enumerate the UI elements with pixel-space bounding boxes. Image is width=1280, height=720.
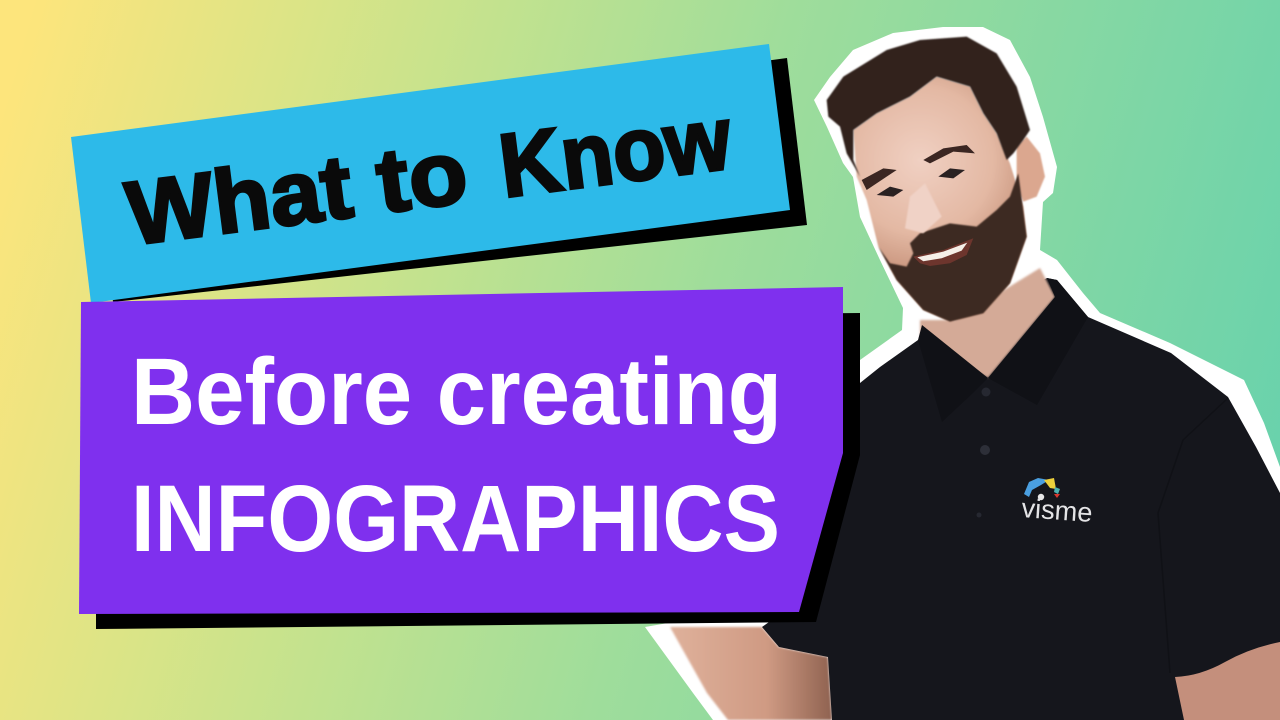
sleeve seam: [1158, 398, 1228, 673]
word: Know: Know: [494, 88, 738, 217]
neck: [920, 268, 1055, 378]
logo fan icon: [1024, 478, 1060, 500]
logo wordmark: visme: [1021, 493, 1094, 528]
shirt: [762, 278, 1280, 720]
face: [853, 77, 1027, 322]
eyebrows: [862, 145, 975, 190]
eyes: [877, 168, 965, 197]
blue banner: [71, 44, 790, 303]
presenter photo illustration: [645, 27, 1280, 720]
blue banner shadow: [95, 58, 807, 302]
right forearm: [1170, 636, 1280, 720]
nose highlight: [905, 183, 942, 233]
purple banner shadow: [96, 313, 860, 629]
ear: [1017, 137, 1045, 202]
beard: [878, 173, 1027, 322]
heading: Before creating: Before creating: [131, 339, 782, 445]
head: [827, 37, 1045, 322]
word: What: What: [121, 137, 358, 265]
left arm: [670, 627, 832, 720]
white cutout outline: [645, 27, 1280, 720]
visme logo: [1021, 478, 1094, 528]
heading: INFOGRAPHICS: INFOGRAPHICS: [131, 466, 780, 572]
word: to: to: [371, 122, 473, 233]
hair: [827, 37, 1030, 177]
purple banner: [79, 287, 843, 614]
shirt collar: [918, 278, 1088, 422]
mouth and teeth: [913, 238, 973, 266]
shirt buttons: [976, 388, 990, 518]
heading: What to Know: [121, 88, 738, 265]
